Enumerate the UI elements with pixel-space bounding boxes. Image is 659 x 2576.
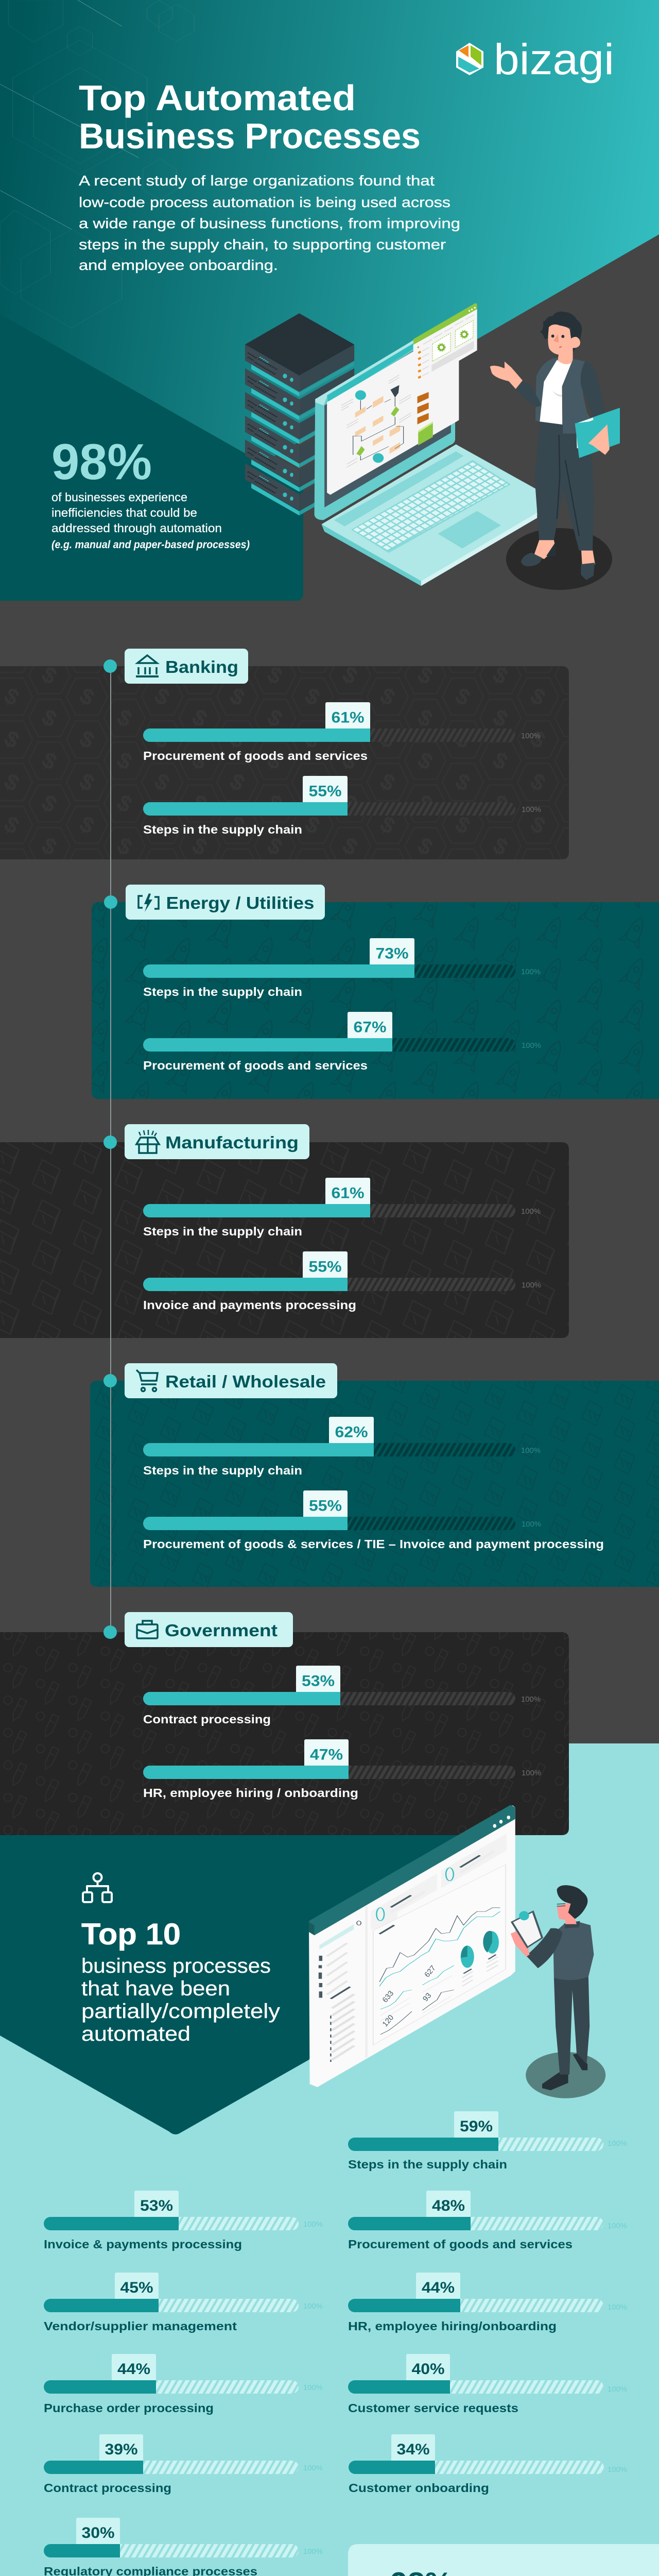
- bar: retail supply chain 62%: [143, 1417, 541, 1477]
- bar: manufacturing invoice 55%: Invoice and payments processing: [143, 1298, 356, 1312]
- badge: government: [103, 1612, 293, 1647]
- bar: manufacturing invoice 55%: 100%: [522, 1281, 541, 1290]
- top 10 description: partially/completely: [81, 2000, 280, 2023]
- callout: 98% of organizations: [348, 2544, 659, 2576]
- top 10 description: that have been: [81, 1977, 230, 2000]
- badge: manufacturing: [103, 1124, 309, 1159]
- bar: retail procurement 55%: 55%: [309, 1497, 342, 1515]
- bar: energy procurement 67%: 67%: [353, 1019, 386, 1036]
- intro paragraph: a wide range of business functions, from improving: [79, 215, 460, 231]
- badge: energy / utilities: [104, 885, 325, 920]
- bar: banking supply chain 55%: [143, 776, 541, 836]
- bar: retail supply chain 62%: 100%: [521, 1446, 541, 1455]
- bar: procurement 48%: 100%: [608, 2222, 627, 2230]
- illustration: analytics dashboard window: 93: [422, 1992, 433, 2003]
- bar: procurement 48%: 48%: [432, 2197, 465, 2214]
- bar: retail procurement 55%: Procurement of goods & services / TIE – Invoice and payment processing: [143, 1537, 604, 1551]
- bar: contract 39%: 100%: [303, 2464, 323, 2472]
- bar: vendor 45%: 45%: [120, 2279, 153, 2296]
- bar: invoice 53%: 100%: [303, 2220, 323, 2229]
- panel: energy / utilities: [92, 902, 659, 1099]
- badge: government: Government: [165, 1621, 278, 1640]
- header gradient background: [0, 0, 659, 463]
- bar: government HR 47%: 47%: [310, 1747, 343, 1763]
- top 10 description: [81, 1955, 280, 2045]
- badge: banking: [103, 649, 248, 684]
- illustration: presenter: [490, 312, 620, 590]
- bar: banking procurement 61%: Procurement of goods and services: [143, 749, 368, 762]
- bar: regulatory 30%: 100%: [303, 2547, 323, 2556]
- stat description: inefficiencies that could be: [51, 506, 197, 519]
- bar: contract 39%: [44, 2434, 323, 2495]
- intro paragraph: [79, 173, 460, 273]
- bar: government contract 53%: Contract processing: [143, 1713, 271, 1726]
- icon: cart: [136, 1370, 158, 1391]
- bar: purchase order 44%: 44%: [117, 2361, 150, 2378]
- bar: supply chain 59%: [348, 2111, 627, 2171]
- bar: manufacturing supply chain 61%: 61%: [332, 1185, 365, 1201]
- title: Top Automated: [79, 78, 356, 118]
- panel: banking: [0, 666, 569, 859]
- top 10 chart: [44, 2111, 627, 2576]
- illustration: analytics dashboard window: 120: [381, 2013, 395, 2028]
- bar: vendor 45%: Vendor/supplier management: [44, 2319, 237, 2333]
- badge: manufacturing: Manufacturing: [165, 1133, 299, 1152]
- illustration: analytics dashboard window: [309, 1805, 515, 2087]
- title: Business Processes: [79, 116, 421, 156]
- illustration: laptop with process diagram: [315, 325, 537, 586]
- bar: banking supply chain 55%: 55%: [309, 783, 342, 800]
- bar: energy procurement 67%: [143, 1012, 541, 1072]
- bar: retail procurement 55%: [143, 1490, 604, 1551]
- bar: HR 44%: 44%: [422, 2279, 455, 2296]
- presenter shadow: [506, 528, 612, 590]
- bar: energy supply chain 73%: 73%: [376, 945, 409, 962]
- bar: invoice 53%: [44, 2191, 323, 2251]
- badge: energy / utilities: Energy / Utilities: [166, 893, 314, 912]
- bar: government contract 53%: 100%: [521, 1695, 541, 1704]
- bar: supply chain 59%: 100%: [608, 2139, 627, 2148]
- panel: government: [0, 1632, 569, 1835]
- stat description: (e.g. manual and paper-based processes): [51, 539, 250, 551]
- badge: retail / wholesale: [103, 1363, 337, 1398]
- bar: customer service 40%: Customer service requests: [348, 2401, 518, 2415]
- bar: procurement 48%: [348, 2191, 627, 2251]
- panel: 98% of businesses stat: [0, 314, 303, 601]
- illustration: analyst with clipboard: [511, 1885, 605, 2098]
- bar: HR 44%: [348, 2273, 627, 2333]
- bar: contract 39%: Contract processing: [44, 2481, 171, 2495]
- bar: procurement 48%: Procurement of goods and services: [348, 2238, 573, 2251]
- icon: bank: [136, 655, 159, 676]
- bar: retail supply chain 62%: 62%: [335, 1424, 368, 1440]
- icon: briefcase: [137, 1621, 158, 1638]
- badge: banking: Banking: [165, 657, 238, 676]
- illustration: floating process window: [413, 303, 477, 386]
- bar: vendor 45%: 100%: [303, 2302, 323, 2311]
- timeline line: [110, 666, 111, 1627]
- bar: supply chain 59%: 59%: [460, 2118, 493, 2135]
- bar: customer service 40%: [348, 2354, 627, 2415]
- bar: purchase order 44%: [44, 2354, 323, 2415]
- top 10 description: automated: [81, 2023, 190, 2045]
- icon: energy bolt: [138, 893, 159, 912]
- bar: purchase order 44%: Purchase order processing: [44, 2401, 214, 2415]
- bar: retail procurement 55%: 100%: [522, 1520, 541, 1529]
- bar: regulatory 30%: [44, 2518, 323, 2576]
- bar: banking procurement 61%: [143, 702, 541, 762]
- title: [79, 78, 421, 156]
- bar: customer onboarding 34%: [349, 2434, 627, 2495]
- bar: manufacturing supply chain 61%: Steps in the supply chain: [143, 1225, 302, 1238]
- laptop keyboard: [351, 460, 511, 553]
- stat description: addressed through automation: [51, 521, 222, 535]
- intro paragraph: low-code process automation is being used across: [79, 194, 450, 210]
- icon: factory box: [136, 1130, 159, 1153]
- bar: energy supply chain 73%: [143, 938, 541, 998]
- panel: top 10 heading chevron: [0, 1835, 458, 2134]
- bar: customer onboarding 34%: 34%: [396, 2441, 429, 2458]
- bar: vendor 45%: [44, 2273, 323, 2333]
- bar: invoice 53%: Invoice & payments processing: [44, 2238, 242, 2251]
- heading: top 10: Top 10: [81, 1918, 181, 1951]
- bar: customer onboarding 34%: 100%: [608, 2465, 627, 2474]
- intro paragraph: A recent study of large organizations found that: [79, 173, 435, 189]
- bar: regulatory 30%: 30%: [81, 2524, 114, 2541]
- badge: retail / wholesale: Retail / Wholesale: [165, 1372, 326, 1391]
- bar: supply chain 59%: Steps in the supply chain: [348, 2158, 507, 2171]
- bar: government HR 47%: HR, employee hiring / onboarding: [143, 1786, 358, 1800]
- bar: manufacturing invoice 55%: [143, 1251, 541, 1312]
- panel: manufacturing: [0, 1142, 569, 1338]
- bar: HR 44%: 100%: [608, 2303, 627, 2312]
- bar: banking supply chain 55%: Steps in the supply chain: [143, 823, 302, 836]
- bar: energy supply chain 73%: 100%: [521, 968, 541, 976]
- bar: purchase order 44%: 100%: [303, 2383, 323, 2392]
- bar: government HR 47%: 100%: [522, 1769, 541, 1777]
- bar: banking procurement 61%: 100%: [521, 732, 541, 740]
- top 10 description: business processes: [81, 1955, 271, 1977]
- bar: manufacturing invoice 55%: 55%: [309, 1258, 342, 1276]
- bar: energy procurement 67%: Procurement of goods and services: [143, 1059, 368, 1072]
- illustration: server stack: [245, 313, 354, 515]
- bar: contract 39%: 39%: [105, 2441, 138, 2458]
- intro paragraph: and employee onboarding.: [79, 257, 278, 273]
- analyst shadow: [526, 2052, 605, 2098]
- illustration: analytics dashboard window: 627: [423, 1964, 438, 1979]
- intro paragraph: steps in the supply chain, to supporting customer: [79, 236, 446, 252]
- bar: customer service 40%: 100%: [608, 2385, 627, 2394]
- bar: retail supply chain 62%: Steps in the supply chain: [143, 1464, 302, 1477]
- bar: banking supply chain 55%: 100%: [522, 805, 541, 814]
- bar: government contract 53%: [143, 1666, 541, 1726]
- stat description: [51, 490, 250, 551]
- logo: bizagi: bizagi: [494, 35, 614, 83]
- bar: customer onboarding 34%: Customer onboarding: [349, 2481, 489, 2495]
- panel: retail / wholesale: [90, 1381, 659, 1587]
- lower light teal background: [0, 1743, 659, 2576]
- bar: manufacturing supply chain 61%: [143, 1178, 541, 1238]
- bar: government HR 47%: [143, 1739, 541, 1800]
- stat description: of businesses experience: [51, 490, 187, 504]
- bar: manufacturing supply chain 61%: 100%: [521, 1207, 541, 1216]
- bar: invoice 53%: 53%: [140, 2197, 173, 2214]
- bar: energy procurement 67%: 100%: [522, 1041, 541, 1050]
- stat number: 98%: [51, 433, 152, 490]
- illustration: analytics dashboard window: 633: [381, 1989, 395, 2004]
- bar: government contract 53%: 53%: [302, 1672, 335, 1690]
- bar: banking procurement 61%: 61%: [332, 709, 365, 726]
- bar: HR 44%: HR, employee hiring/onboarding: [348, 2319, 557, 2333]
- bar: customer service 40%: 40%: [412, 2361, 445, 2378]
- icon: org chart: [83, 1873, 112, 1902]
- bar: energy supply chain 73%: Steps in the supply chain: [143, 985, 302, 998]
